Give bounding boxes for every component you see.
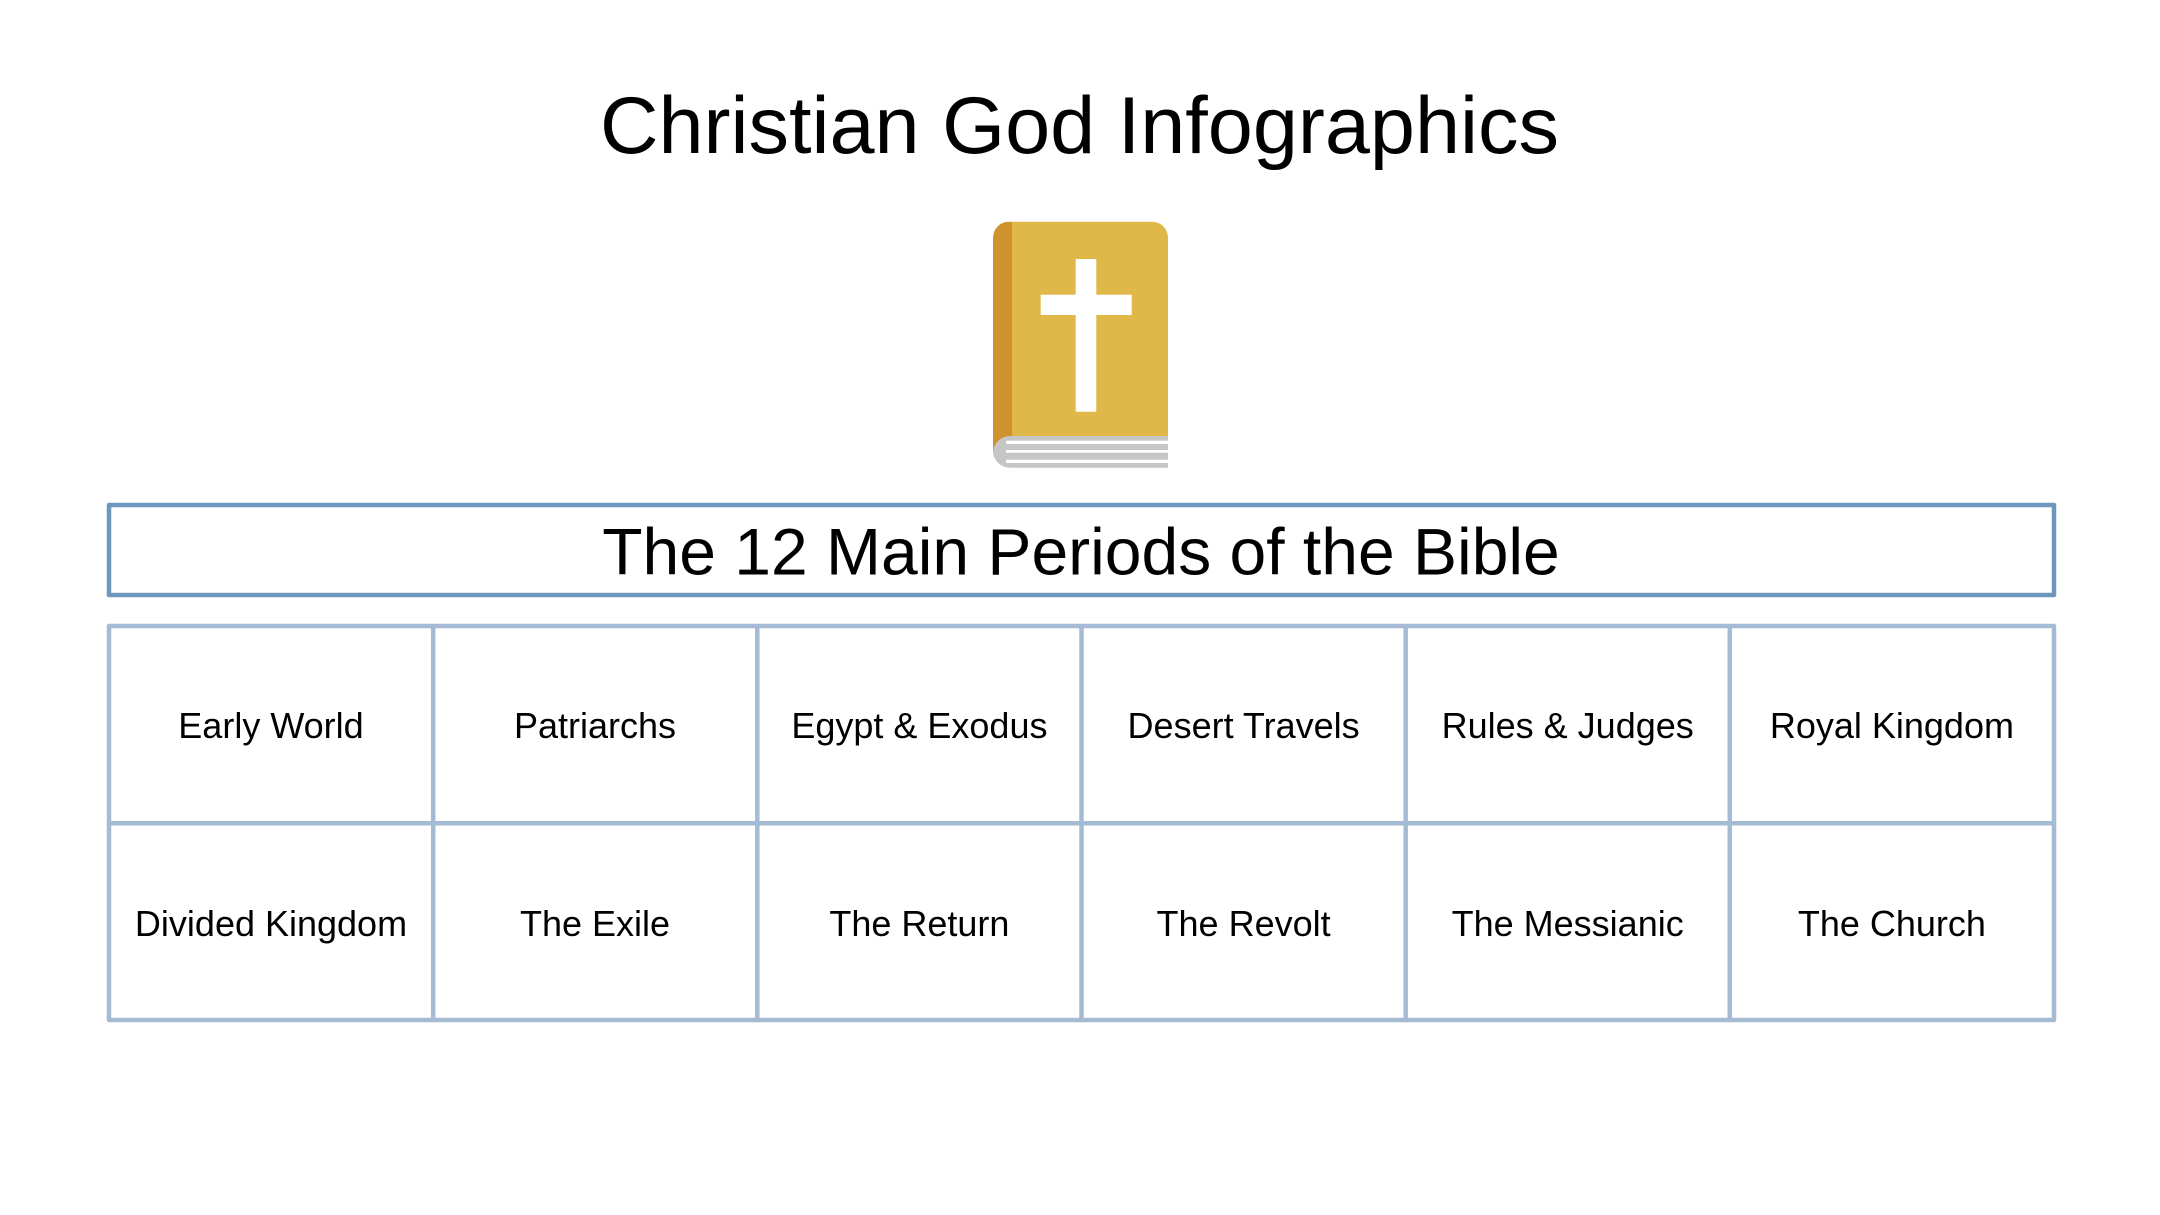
icon: bible book with cross [993,222,1168,468]
row 2 labels: The Revolt [1157,903,1331,944]
row 1 labels: Early World [178,705,364,746]
subtitle box [109,505,2054,595]
row 2 labels: The Return [829,903,1009,944]
row 1 labels: Desert Travels [1128,705,1360,746]
row 2 labels: The Exile [520,903,670,944]
title: Christian God Infographics [600,81,1559,171]
row 2 labels: Divided Kingdom [135,903,407,944]
subtitle box: The 12 Main Periods of the Bible [602,514,1560,588]
row 2 labels: The Messianic [1452,903,1684,944]
periods table [109,626,2054,1020]
row 1 labels: Rules & Judges [1442,705,1694,746]
row 1 labels: Patriarchs [514,705,676,746]
row 1 labels: Egypt & Exodus [791,705,1047,746]
row 1 labels: Royal Kingdom [1770,705,2014,746]
row 2 labels [135,903,1986,944]
row 2 labels: The Church [1798,903,1986,944]
row 1 labels [178,705,2014,746]
table grid [109,626,2054,1020]
